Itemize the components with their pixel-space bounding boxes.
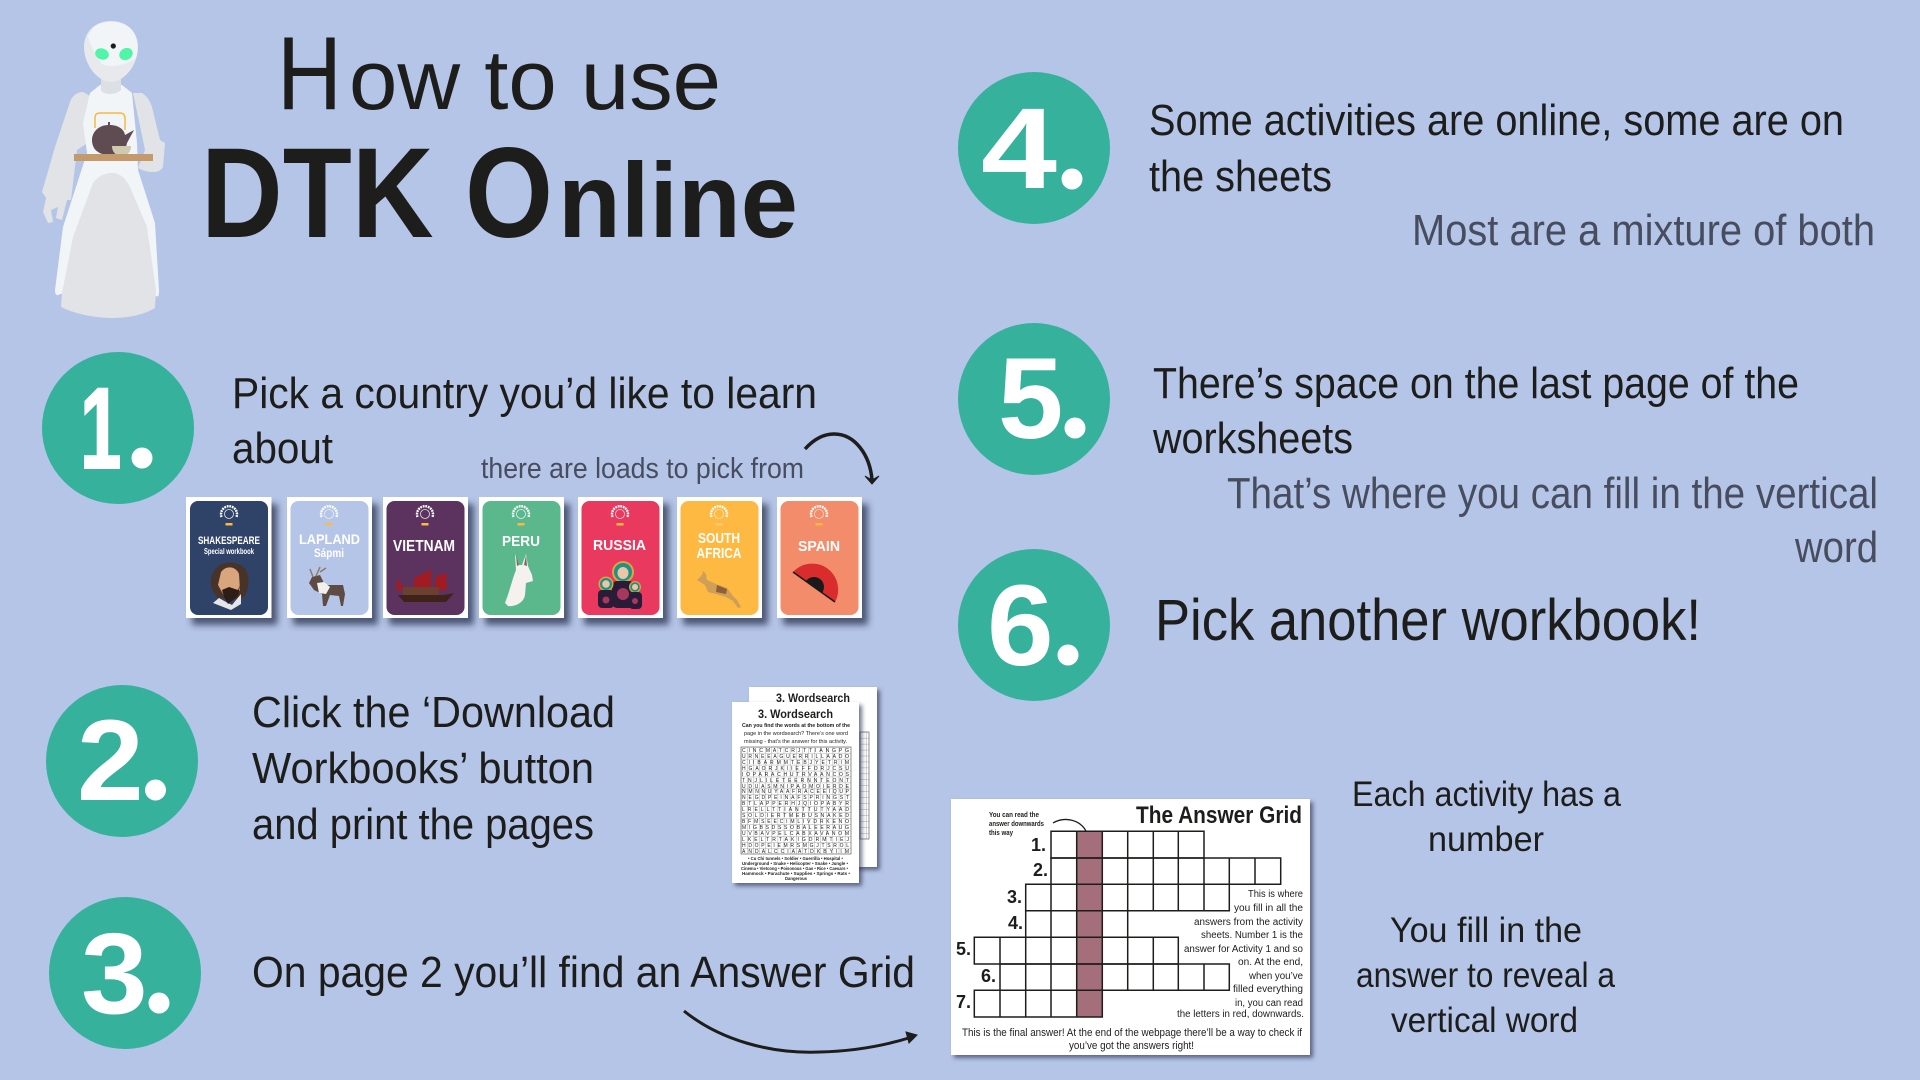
step 2 number badge: 2. [77,697,177,825]
wordsearch letter grid: CINCMATCRJTTIANGPG [742,748,849,754]
row numbers: 7. [956,992,971,1012]
side note: activity numbers: You fill in the [1390,911,1582,950]
step 1 text: Pick a country you’d like to learn [232,369,817,418]
card: South Africa: AFRICA [696,545,742,562]
step 5 text: word [1794,523,1878,572]
wordsearch letter grid: ANDALCCIAATDKBYIIM [742,849,849,855]
row numbers: 1. [1031,835,1046,855]
back sheet [749,687,877,867]
card: Peru: PERU [502,533,540,550]
title: nline [558,142,798,260]
heading: The Answer Grid: The Answer Grid [1136,802,1302,829]
word list [741,856,850,881]
title: ow to use [349,33,721,127]
wordsearch letter grid: UDUASMNIPAOMOIERDE [742,784,850,790]
step 4 text [1149,96,1875,255]
explanation text: filled everything [1233,984,1303,995]
side note: activity numbers: vertical word [1391,1001,1578,1040]
step 5 text [1152,359,1878,572]
teapot [92,113,134,156]
arrow: to answer grid [684,1011,917,1052]
wordsearch letter grid: LKELTRTAKIGDRMTIEJ [742,837,850,843]
title: H [277,16,342,132]
card: South Africa: SOUTH [698,530,740,547]
side note: activity numbers: Each activity has a [1352,775,1621,814]
word list: Dangerous [785,876,807,881]
word list: • Cu Chi tunnels • Soldier • Guerrilla • Hospital • [748,856,843,861]
card: Spain: SPAIN [798,538,840,555]
card: Spain [777,497,862,618]
step 2 text [252,688,615,849]
note: read downwards [989,810,1044,837]
explanation text: you fill in all the [1234,903,1303,914]
back sheet: 3. Wordsearch [776,691,850,705]
arrow: down the red column [1053,820,1086,831]
explanation text: when you’ve [1248,971,1303,982]
arrow: down to workbooks [805,434,879,484]
wordsearch letter grid: HDOPEIEMRSMGJTSROL [742,843,849,849]
note: read downwards: answer downwards [989,819,1044,828]
card: Russia: RUSSIA [593,537,646,554]
answer grid card [951,799,1310,1055]
step 4 number badge [958,72,1110,224]
icon: robot serving tea [42,21,165,318]
card: Shakespeare: SHAKESPEARE [198,535,260,547]
step 6 number badge: 6. [987,562,1087,690]
wordsearch letter grid: NMNNUYAAFRACEEIQUP [742,789,850,795]
step 4 text: Most are a mixture of both [1412,206,1875,255]
title [201,16,798,265]
card: South Africa [677,497,762,618]
step 4 text: Some activities are online, some are on [1149,96,1844,145]
wordsearch letter grid: NEGDPEINAFSPRINGST [742,795,849,801]
step 2 text: Click the ‘Download [252,688,615,737]
side note: activity numbers [1352,775,1621,1040]
step 6 number badge [958,549,1110,701]
card: Russia [578,497,663,618]
card: Lapland: Sápmi [314,546,344,560]
explanation text: on. At the end, [1238,957,1303,968]
front sheet: Can you find the words at the bottom of the [742,723,850,729]
row numbers: 5. [956,939,971,959]
final answer note: you’ve got the answers right! [1069,1040,1194,1052]
wordsearch letter grid: HGAORJKIIEFFORJCSU [742,766,849,772]
step 5 text: worksheets [1152,414,1353,463]
red answer column [1077,831,1102,1017]
worksheet thumbnails [732,687,877,883]
word list: Hammock • Parachute • Supplies • Springs • Rats • [742,871,850,876]
final answer note: This is the final answer! At the end of the webpage there’ll be a way to check if [962,1027,1303,1039]
side note: activity numbers: number [1428,820,1544,859]
wordsearch letter grid: IOPARACHUTRVAANCOS [742,772,850,778]
eye: left [94,46,110,62]
final answer note [962,1027,1303,1052]
note: read downwards: this way [989,828,1014,837]
step 1 number badge [42,352,194,504]
front sheet: 3. Wordsearch [758,707,833,721]
front sheet [732,702,859,883]
word list: Cinema • Vietcong • Poisonous • Gas • Rice • Caesars • [741,866,848,871]
step 1 text [232,369,817,473]
wordsearch letter grid: URNEEAGUERRILLAADO [742,754,849,760]
step 4 number badge: 4. [981,85,1095,213]
explanation text [1177,889,1304,1020]
step 1 number badge: 1. [80,365,142,493]
explanation text: the letters in red, downwards. [1177,1009,1304,1020]
wordsearch letter grid: LRELLTTIANTTUTYAAD [742,807,849,813]
front sheet: page in the wordsearch? There’s one word [744,731,848,737]
eye: right [117,45,135,63]
explanation text: answers from the activity [1194,917,1303,928]
explanation text: in, you can read [1235,998,1303,1009]
note: read downwards: You can read the [989,810,1039,819]
side note: activity numbers: answer to reveal a [1356,956,1615,995]
wordsearch letter grid: TNJLILETEERNNTEONT [742,778,849,784]
explanation text: sheets. Number 1 is the [1201,930,1303,941]
row numbers: 6. [981,966,996,986]
explanation text: answer for Activity 1 and so [1184,944,1303,955]
wordsearch letter grid: CIIBARMMTEBJYETRIM [742,760,849,766]
workbook covers [186,497,862,618]
row numbers: 4. [1008,913,1023,933]
row numbers: 2. [1033,860,1048,880]
wordsearch letter grid [741,747,851,855]
card: Lapland [287,497,372,618]
wordsearch letter grid: MIGBSDSSOBALEERAUG [742,825,849,831]
step 1 text: about [232,424,333,473]
step 5 text: There’s space on the last page of the [1153,359,1799,408]
card: Peru [479,497,564,618]
step 5 number badge [958,323,1110,475]
grid cells [974,831,1281,1017]
explanation text: This is where [1248,889,1303,900]
note: loads to pick from: there are loads to pick from [481,453,804,485]
wordsearch letter grid: SOLDIERTMEBUSNAKED [742,813,849,819]
card: Shakespeare: Special workbook [204,547,254,556]
step 5 number badge: 5. [998,335,1096,463]
step 2 text: Workbooks’ button [252,744,594,793]
wordsearch letter grid: BTLAPPERHJQIOPABYR [742,801,849,807]
sensor dot [111,43,116,49]
row numbers: 3. [1007,887,1022,907]
step 4 text: the sheets [1149,152,1332,201]
step 6 text: Pick another workbook! [1155,588,1701,653]
card: Shakespeare [186,497,272,618]
row numbers [956,835,1048,1012]
wordsearch letter grid: BFMSEECIMLIVDRKENO [742,819,849,825]
card: Vietnam: VIETNAM [393,538,455,555]
step 3 number badge: 3. [81,910,181,1038]
card: Lapland: LAPLAND [299,531,360,547]
wordsearch letter grid: UVBAVPELCABXAVANOM [742,831,849,837]
card: Vietnam [383,497,468,618]
tray [74,154,153,161]
word list: Underground • Snake • Helicopter • Snake • Jungle • [742,861,848,866]
step 3 text: On page 2 you’ll find an Answer Grid [252,948,915,997]
front sheet: missing - that’s the answer for this activity. [744,739,847,745]
title: DTK O [201,122,553,265]
step 3 number badge [49,897,201,1049]
step 2 text: and print the pages [252,800,594,849]
step 2 number badge [46,685,198,837]
